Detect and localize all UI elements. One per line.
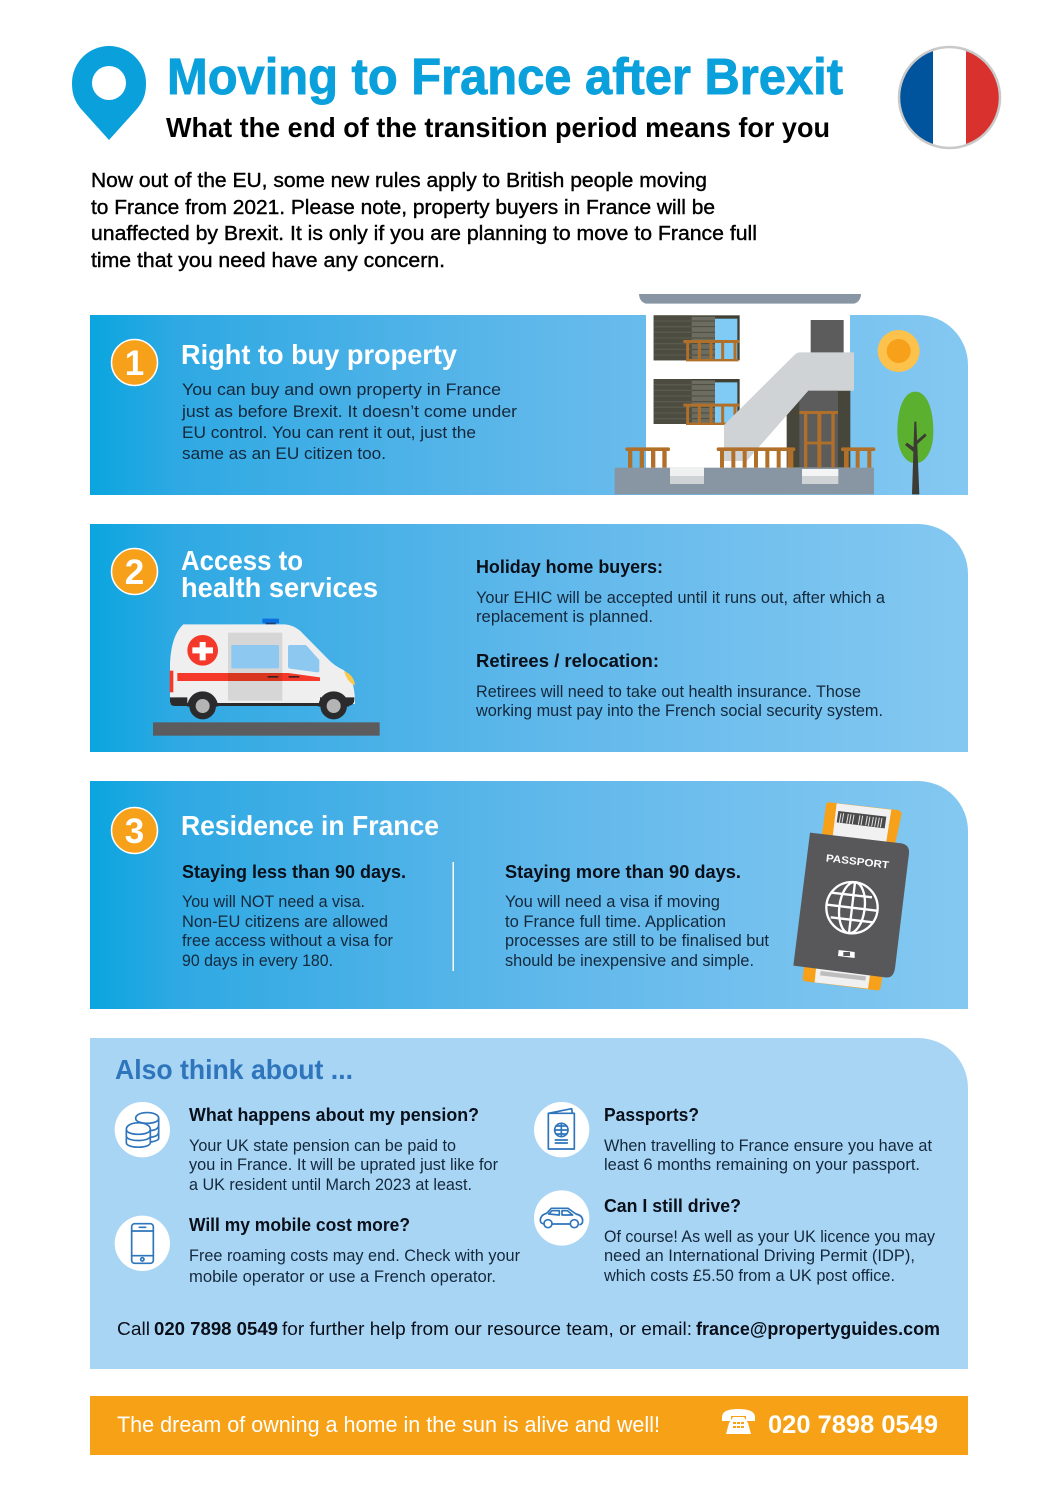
footer phone number: 020 7898 0549	[768, 1411, 938, 1439]
contact line: france@propertyguides.com	[696, 1319, 940, 1339]
intro text: to France from 2021. Please note, property buyers in France will be	[91, 196, 715, 219]
illustration: building, sun and tree	[615, 294, 933, 494]
icon: car	[534, 1190, 589, 1246]
text: staying more than 90 days: to France full time. Application	[505, 912, 726, 931]
number badge 1	[112, 340, 158, 386]
icon: coins	[115, 1102, 170, 1157]
text: staying less than 90 days: Staying less than 90 days.	[182, 862, 406, 882]
text: staying less than 90 days	[182, 862, 406, 970]
text: can I still drive: Can I still drive?	[604, 1196, 741, 1216]
text: pension: you in France. It will be uprated just like for	[189, 1155, 498, 1174]
text: staying less than 90 days: You will NOT need a visa.	[182, 892, 365, 911]
contact line: for further help from our resource team, or email:	[282, 1319, 692, 1339]
text: passports: Passports?	[604, 1105, 699, 1125]
text: retirees / relocation: Retirees / relocation:	[476, 651, 659, 671]
text: holiday home buyers	[476, 557, 886, 626]
text: holiday home buyers: Your EHIC will be accepted until it runs out, after which a	[476, 588, 886, 607]
body text 1: You can buy and own property in France	[182, 380, 501, 399]
text: staying less than 90 days: Non-EU citizens are allowed	[182, 912, 388, 931]
intro text: Now out of the EU, some new rules apply to British people moving	[91, 169, 707, 192]
contact line	[117, 1319, 940, 1339]
heading 2: Access to	[181, 545, 303, 576]
text: holiday home buyers: Holiday home buyers:	[476, 557, 663, 577]
icon: French flag	[899, 46, 1001, 149]
panel: residence in France	[90, 781, 968, 1009]
text: mobile cost: mobile operator or use a French operator.	[189, 1267, 496, 1286]
icon: passport	[534, 1102, 589, 1157]
text: passports: least 6 months remaining on your passport.	[604, 1155, 920, 1174]
text: mobile cost: Free roaming costs may end. Check with your	[189, 1246, 520, 1265]
footer banner	[90, 1396, 968, 1455]
illustration: passport and boarding pass: PASSPORT	[825, 853, 890, 872]
text: can I still drive: need an International Driving Permit (IDP),	[604, 1246, 915, 1265]
text: can I still drive: which costs £5.50 from a UK post office.	[603, 1266, 895, 1285]
panel: access to health services	[90, 524, 968, 752]
text: retirees / relocation	[475, 651, 883, 720]
illustration: ambulance	[153, 619, 380, 736]
body text 1: just as before Brexit. It doesn’t come under	[181, 402, 517, 421]
text: pension: What happens about my pension?	[189, 1105, 479, 1125]
number badge 3: 3	[125, 812, 144, 851]
panel background 3	[90, 781, 968, 1009]
body text 1	[181, 380, 517, 463]
illustration: passport and boarding pass	[793, 802, 909, 990]
text: can I still drive: Of course! As well as your UK licence you may	[604, 1227, 935, 1246]
text: holiday home buyers: replacement is planned.	[476, 607, 653, 626]
icon: telephone	[722, 1409, 755, 1434]
panel: also think about	[90, 1038, 968, 1369]
text: staying less than 90 days: free access without a visa for	[182, 931, 393, 950]
text: staying more than 90 days: Staying more than 90 days.	[505, 862, 741, 882]
text: can I still drive	[603, 1196, 935, 1285]
intro text	[91, 169, 757, 272]
subtitle: What the end of the transition period means for you	[166, 112, 830, 143]
text: mobile cost	[189, 1215, 520, 1286]
panel background 2	[90, 524, 968, 752]
heading 1: Right to buy property	[181, 339, 457, 370]
number badge 1: 1	[125, 344, 144, 383]
contact line: 020 7898 0549	[154, 1319, 278, 1339]
text: staying more than 90 days: You will need a visa if moving	[505, 892, 720, 911]
number badge 2	[112, 548, 158, 594]
heading 2: health services	[181, 572, 378, 603]
heading 3: Residence in France	[181, 810, 439, 841]
text: passports	[604, 1105, 932, 1174]
body text 1: same as an EU citizen too.	[182, 444, 386, 463]
title: Moving to France after Brexit	[167, 48, 843, 105]
text: pension: Your UK state pension can be paid to	[189, 1136, 456, 1155]
text: staying more than 90 days	[505, 862, 769, 970]
text: staying less than 90 days: 90 days in every 180.	[182, 951, 333, 970]
icon: location pin	[72, 46, 146, 140]
heading 2	[181, 545, 378, 603]
text: passports: When travelling to France ensure you have at	[604, 1136, 932, 1155]
icon: mobile phone	[115, 1216, 170, 1271]
footer slogan: The dream of owning a home in the sun is alive and well!	[117, 1412, 660, 1437]
text: mobile cost: Will my mobile cost more?	[189, 1215, 410, 1235]
number badge 3	[112, 808, 158, 854]
text: staying more than 90 days: should be inexpensive and simple.	[505, 951, 754, 970]
text: staying more than 90 days: processes are still to be finalised but	[505, 931, 769, 950]
contact line: Call	[117, 1319, 150, 1339]
body text 1: EU control. You can rent it out, just the	[182, 423, 476, 442]
text: pension	[189, 1105, 498, 1194]
text: retirees / relocation: Retirees will need to take out health insurance. Those	[476, 682, 861, 701]
heading: also think about: Also think about ...	[115, 1054, 353, 1085]
panel background 1	[90, 315, 968, 495]
intro text: time that you need have any concern.	[91, 249, 445, 272]
text: retirees / relocation: working must pay into the French social security system.	[475, 701, 883, 720]
panel background 4	[90, 1038, 968, 1369]
number badge 2: 2	[125, 553, 144, 592]
text: pension: a UK resident until March 2023 at least.	[189, 1175, 472, 1194]
panel: right to buy property	[90, 294, 968, 495]
intro text: unaffected by Brexit. It is only if you are planning to move to France full	[91, 222, 757, 245]
